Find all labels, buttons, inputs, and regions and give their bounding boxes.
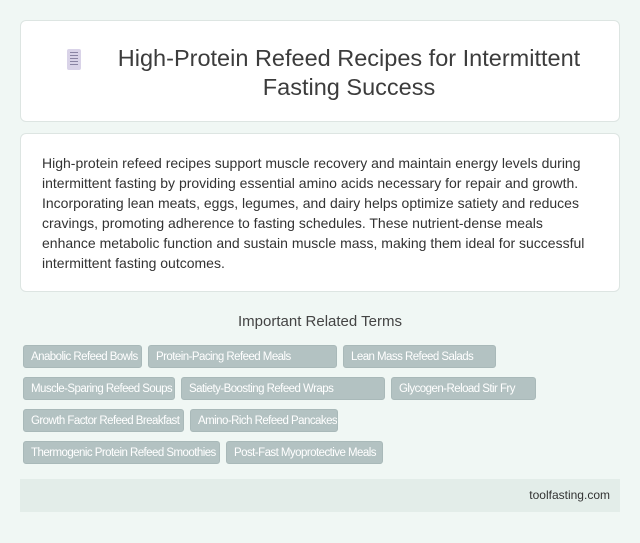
tags: Glycogen-Reload Stir Fry — [399, 383, 515, 395]
footer — [20, 479, 620, 512]
tags: Muscle-Sparing Refeed Soups — [31, 383, 172, 395]
icon: document — [67, 49, 81, 70]
tags: Anabolic Refeed Bowls — [31, 351, 138, 363]
title: High-Protein Refeed Recipes for Intermittent Fasting Success — [118, 45, 580, 100]
tags: Satiety-Boosting Refeed Wraps — [189, 383, 333, 395]
tags: Amino-Rich Refeed Pancakes — [198, 415, 337, 427]
tags: Post-Fast Myoprotective Meals — [234, 447, 376, 459]
tags: Thermogenic Protein Refeed Smoothies — [31, 447, 216, 459]
related terms heading: Important Related Terms — [238, 313, 402, 330]
footer site: toolfasting.com — [529, 488, 610, 502]
tags: Growth Factor Refeed Breakfast — [31, 415, 179, 427]
description text: High-protein refeed recipes support muscle recovery and maintain energy levels during intermittent fasting by providing essential amino acids necessary for repair and growth. Incorporating lean meats, eggs, legumes, and dairy helps optimize satiety and reduces cravings, promoting adherence to fasting schedules. These nutrient-dense meals enhance metabolic function and sustain muscle mass, making them ideal for successful intermittent fasting outcomes. — [42, 155, 584, 271]
tags: Protein-Pacing Refeed Meals — [156, 351, 291, 363]
header card — [20, 20, 620, 122]
tags: Lean Mass Refeed Salads — [351, 351, 473, 363]
description card — [20, 133, 620, 292]
